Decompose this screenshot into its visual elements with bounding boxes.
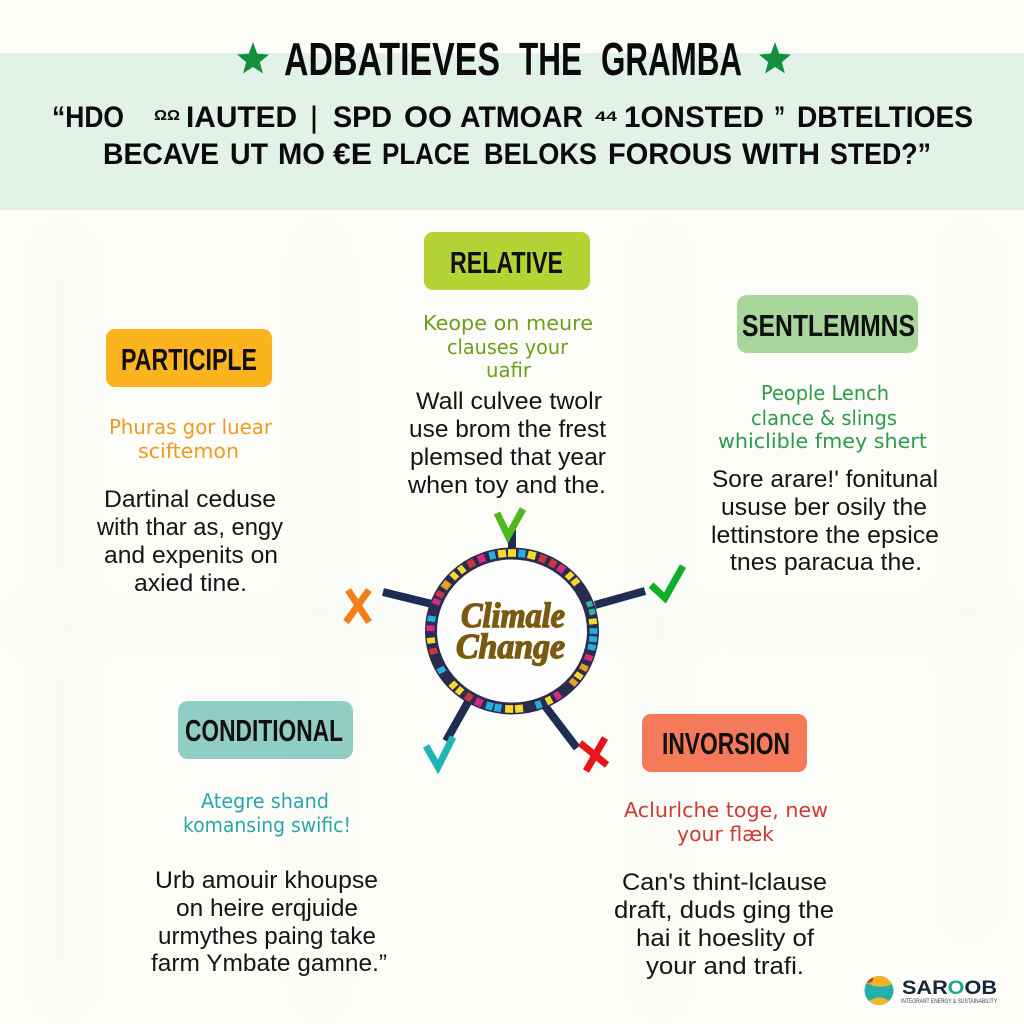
inversion subtitle [624, 798, 828, 846]
sentle label [737, 295, 918, 353]
relative subtitle: Keope on meure [423, 311, 593, 335]
icon: left star [237, 42, 269, 74]
title text: ADBATIEVES [284, 33, 500, 85]
participle body: with thar as, engy [96, 514, 283, 541]
panel: relative [407, 232, 606, 499]
question text: PLACE [382, 138, 470, 171]
conditional subtitle [183, 789, 351, 837]
question text: “HDO [52, 101, 124, 134]
inversion body [614, 869, 834, 980]
conditional body [151, 867, 387, 977]
sentle body: tnes paracua the. [730, 549, 922, 576]
participle body: axied tine. [134, 570, 247, 597]
title text: GRAMBA [601, 33, 742, 85]
relative body: use brom the frest [409, 416, 606, 443]
icon: top check [497, 509, 523, 536]
inversion body: draft, duds ging the [614, 897, 834, 924]
panel: inversion [614, 714, 834, 980]
panel: participle [96, 329, 283, 597]
inversion label: INVORSION [662, 726, 790, 761]
participle label: PARTICIPLE [121, 342, 257, 377]
question text: IAUTED [186, 101, 297, 134]
center label: Change [456, 627, 565, 666]
title text: THE [519, 33, 582, 85]
central diagram [346, 509, 683, 771]
sentle subtitle: People Lench [761, 381, 889, 405]
inversion subtitle: your flæk [677, 822, 774, 846]
relative label [424, 232, 590, 290]
question text: UT [230, 138, 268, 171]
participle body: Dartinal ceduse [104, 486, 276, 513]
conditional subtitle: komansing swific! [183, 813, 351, 837]
logo tagline: INTEGRANT ENERGY & SUSTAINABILITY [901, 999, 997, 1005]
header band [0, 53, 1024, 210]
inversion subtitle: Aclurlche toge, new [624, 798, 828, 822]
conditional label [178, 701, 353, 759]
question text [52, 101, 973, 171]
question text: OO [404, 101, 452, 134]
conditional body: Urb amouir khoupse [155, 867, 378, 894]
conditional body: urmythes paing take [158, 923, 376, 950]
question text: STED?” [830, 138, 931, 171]
question text: FOROUS [608, 138, 732, 171]
relative body: plemsed that year [410, 444, 606, 471]
sentle subtitle: clance & slings [751, 406, 897, 430]
inversion body: Can's thint-lclause [622, 869, 827, 896]
relative body: Wall culvee twolr [416, 388, 602, 415]
panel: sentle [711, 295, 939, 576]
question text: MO [278, 138, 325, 171]
conditional subtitle: Ategre shand [201, 789, 329, 813]
relative body: when toy and the. [407, 472, 606, 499]
conditional body: farm Ymbate gamne.” [151, 950, 387, 977]
sentle body: Sore arare!' fonitunal [712, 466, 938, 493]
sentle body: ususe ber osily the [721, 494, 927, 521]
icon: right star [759, 42, 791, 74]
logo mark [864, 976, 894, 1005]
question text: ΩΩ [154, 107, 180, 124]
icon: bottom left check [426, 737, 453, 767]
question text: DBTELTIOES [797, 101, 973, 134]
sentle body [711, 466, 939, 576]
coloured ring [426, 549, 598, 713]
conditional label: CONDITIONAL [185, 713, 343, 748]
conditional body: on heire erqjuide [176, 895, 358, 922]
participle subtitle: Phuras gor luear [109, 415, 273, 439]
center label [456, 596, 565, 666]
title [237, 33, 791, 85]
question text: 44 [595, 108, 617, 124]
question text: WITH [742, 138, 820, 171]
participle label [106, 329, 272, 387]
panel: conditional [151, 701, 387, 977]
inversion body: your and trafi. [646, 953, 804, 980]
participle subtitle: sciftemon [138, 439, 239, 463]
relative subtitle: uafir [486, 358, 532, 382]
question text: ” [774, 101, 785, 134]
inversion label [642, 714, 807, 772]
logo wordmark: SAROOB [902, 977, 997, 999]
relative subtitle: clauses your [447, 335, 569, 359]
logo [864, 976, 997, 1005]
inversion body: hai it hoeslity of [636, 925, 814, 952]
question text: BELOKS [484, 138, 597, 171]
participle body: and expenits on [104, 542, 278, 569]
sentle body: lettinstore the epsice [711, 522, 939, 549]
question text: SPD [333, 101, 392, 134]
question text: ATMOAR [460, 101, 583, 134]
spokes [383, 530, 645, 748]
icon: bottom right cross [580, 738, 607, 771]
sentle label: SENTLEMMNS [742, 308, 915, 343]
icon: right check [651, 566, 683, 598]
title text [284, 33, 742, 85]
sentle subtitle [718, 381, 927, 453]
question text: 1ONSTED [624, 101, 764, 134]
relative body [407, 388, 606, 499]
icon: left cross [346, 590, 369, 622]
question text: BECAVE [103, 138, 219, 171]
participle body [96, 486, 283, 597]
relative subtitle [423, 311, 593, 382]
center label: Climale [461, 596, 565, 635]
sentle subtitle: whiclible fmey shert [718, 429, 927, 453]
participle subtitle [109, 415, 273, 463]
question text: | [311, 101, 317, 134]
relative label: RELATIVE [450, 245, 563, 280]
question text: €E [333, 138, 372, 171]
